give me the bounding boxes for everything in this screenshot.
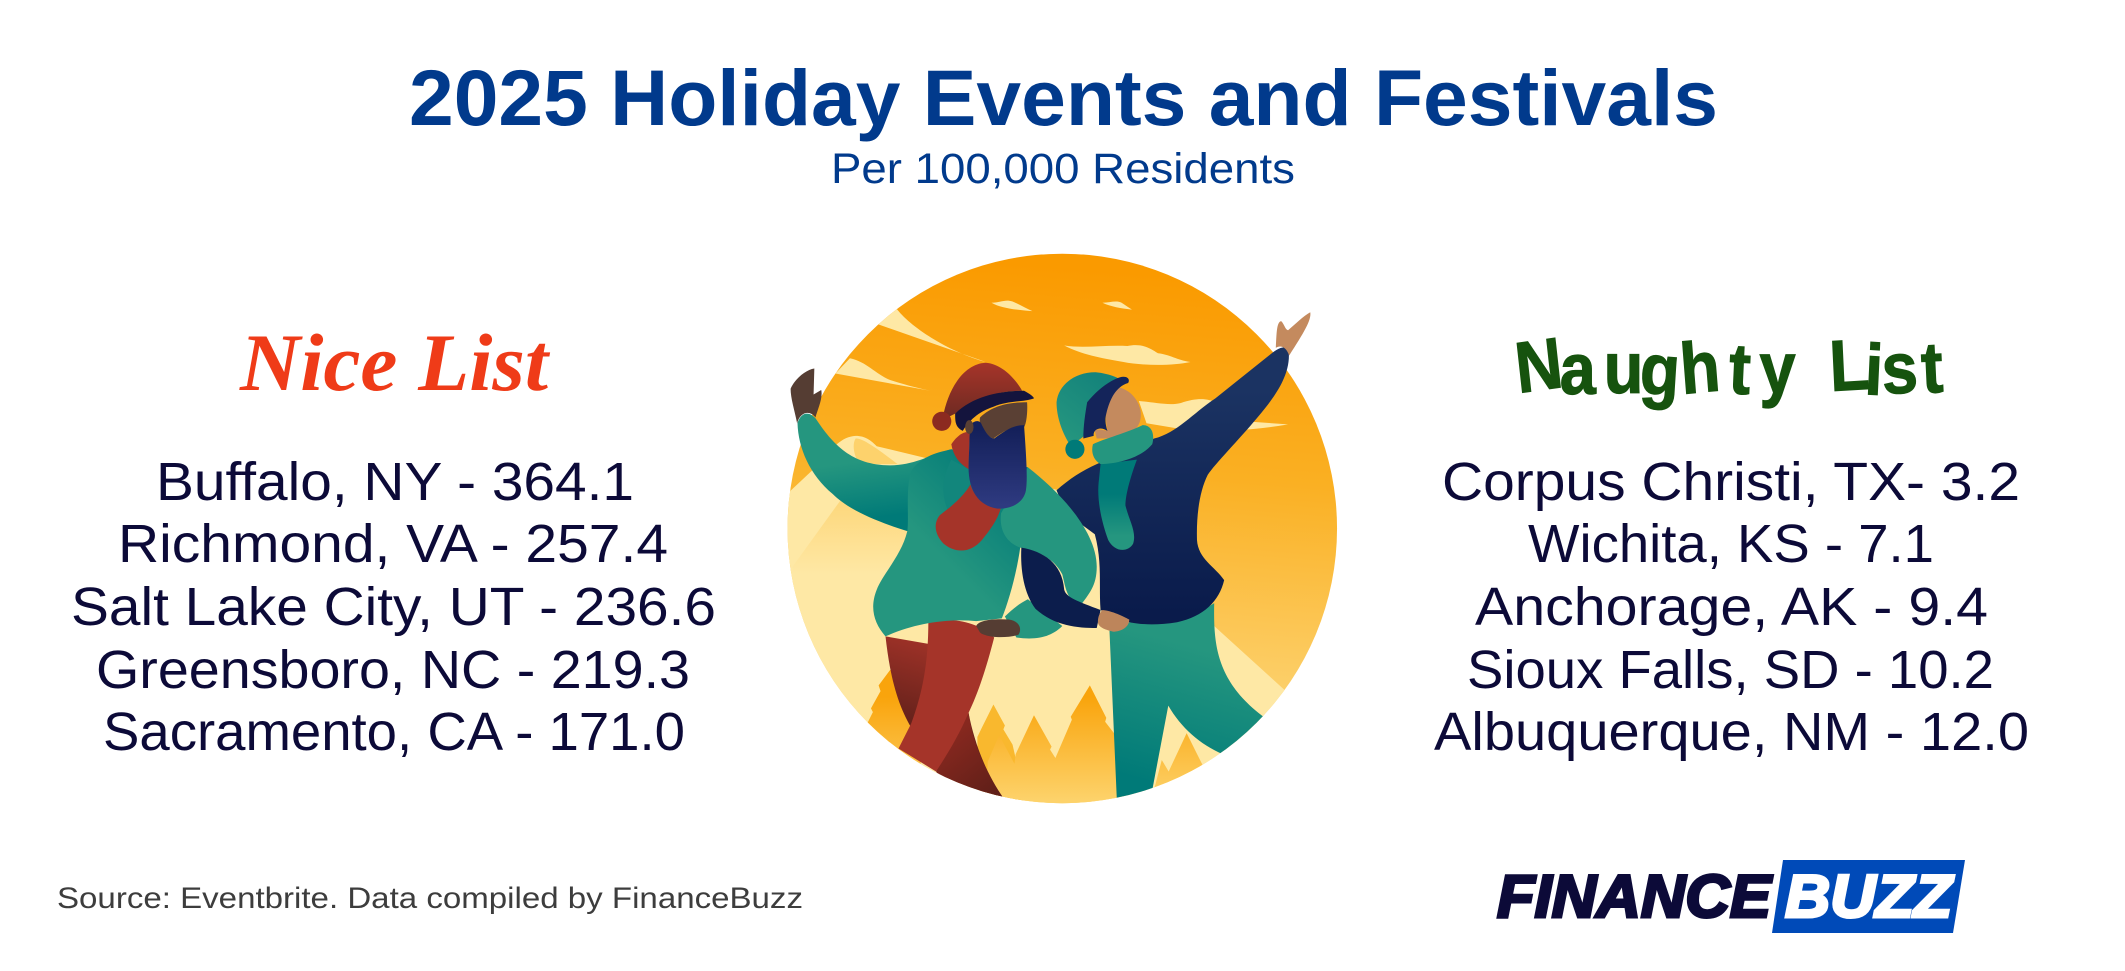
mountains <box>783 436 1290 812</box>
logo word: buzz: BUZZ <box>1785 863 1954 930</box>
naughty list entries: Wichita, KS - 7.1 <box>1528 515 1934 574</box>
man mitten <box>791 369 822 423</box>
man lower arm end <box>1005 599 1062 638</box>
mountain shading <box>854 439 898 464</box>
clouds <box>835 301 1288 430</box>
naughty list entries: Corpus Christi, TX- 3.2 <box>1442 453 2020 512</box>
sky disc <box>788 254 1337 803</box>
man hat <box>932 363 1022 431</box>
naughty list entries <box>1434 453 2029 762</box>
man collar <box>943 460 970 509</box>
man scarf <box>936 432 1001 551</box>
man rear leg <box>886 636 1005 800</box>
woman face <box>1095 387 1141 439</box>
man cap brim and hair <box>955 391 1034 431</box>
nice list entries: Buffalo, NY - 364.1 <box>156 453 634 512</box>
man jumper <box>873 449 1028 636</box>
man ear <box>965 420 974 434</box>
man other arm <box>1001 467 1097 607</box>
naughty list entries: Albuquerque, NM - 12.0 <box>1434 703 2029 762</box>
heading: naughty list: Naughty List <box>1511 322 1945 412</box>
man beard <box>969 421 1027 509</box>
illustration: couple dancing in winter landscape <box>783 254 1337 812</box>
nice list entries: Salt Lake City, UT - 236.6 <box>71 578 716 637</box>
woman raised hand <box>1276 312 1310 356</box>
naughty list entries: Anchorage, AK - 9.4 <box>1475 578 1988 637</box>
woman hat <box>1057 372 1124 459</box>
logo word: finance: FINANCE <box>1497 863 1773 930</box>
woman lower arm <box>1021 548 1101 628</box>
man raised arm <box>797 414 951 536</box>
woman trousers <box>1109 603 1265 804</box>
naughty list entries: Sioux Falls, SD - 10.2 <box>1467 641 1994 700</box>
woman hair <box>1083 377 1129 439</box>
panel: naughty list <box>1434 322 2029 762</box>
logo: FinanceBuzz <box>1497 860 1965 933</box>
man face <box>980 402 1027 439</box>
woman jumper and raised arm <box>1057 347 1289 624</box>
heading: nice list: Nice List <box>239 317 550 408</box>
pine trees <box>868 670 1202 804</box>
panel: nice list <box>71 317 716 762</box>
man hand <box>976 619 1020 637</box>
scenery clipped to disc <box>783 301 1290 812</box>
man front leg <box>899 620 994 771</box>
nice list entries: Greensboro, NC - 219.3 <box>96 641 690 700</box>
nice list entries: Richmond, VA - 257.4 <box>118 515 668 574</box>
nice list entries <box>71 453 716 762</box>
woman scarf neck <box>1092 425 1153 464</box>
subtitle: Per 100,000 Residents <box>831 145 1295 193</box>
title: 2025 Holiday Events and Festivals <box>409 53 1718 142</box>
nice list entries: Sacramento, CA - 171.0 <box>103 703 685 762</box>
woman hand <box>1098 610 1129 632</box>
pine trees back <box>977 704 1026 801</box>
source note: Source: Eventbrite. Data compiled by FinanceBuzz <box>57 882 803 915</box>
logo blue badge <box>1772 860 1965 933</box>
woman scarf tail <box>1098 460 1137 550</box>
